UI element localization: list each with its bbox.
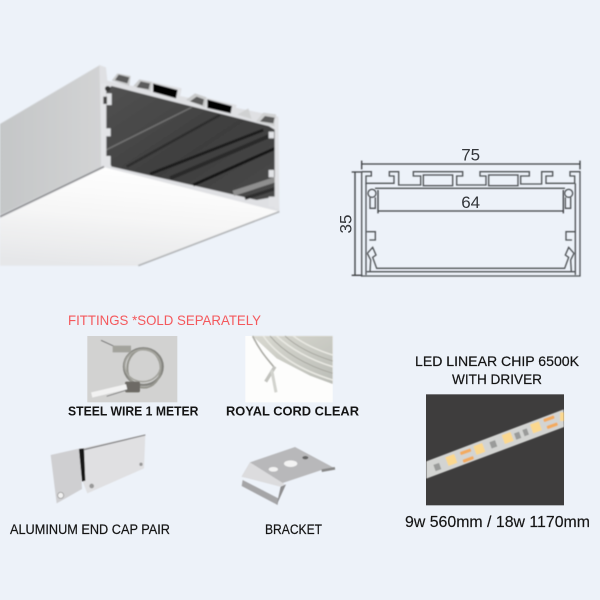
image: bracket: [242, 447, 335, 505]
heading: LED chip: [415, 353, 580, 387]
label: 64: 64: [461, 193, 480, 212]
label: 75: 75: [461, 145, 480, 164]
side face: [0, 65, 102, 215]
image: LED strip: [426, 394, 564, 505]
bottom face: [0, 167, 279, 266]
label: bracket: BRACKET: [265, 522, 322, 537]
image: end cap pair: [51, 434, 145, 503]
interior: [103, 86, 276, 200]
interior ribs: [106, 107, 276, 198]
product render: aluminium profile: [0, 65, 279, 266]
label: wattage: 9w 560mm / 18w 1170mm: [405, 514, 590, 531]
frame clips: [101, 83, 279, 208]
label: steel wire: STEEL WIRE 1 METER: [68, 404, 198, 418]
label: royal cord: ROYAL CORD CLEAR: [226, 404, 359, 418]
heading: LED chip: WITH DRIVER: [452, 371, 542, 387]
end frame: [0, 65, 279, 266]
dimension lines: [352, 161, 580, 275]
label: 35: 35: [336, 215, 355, 233]
image: steel wire: [87, 336, 177, 402]
image: royal cord: [245, 336, 333, 402]
top clips: [112, 73, 276, 127]
label: end cap pair: ALUMINUM END CAP PAIR: [10, 522, 170, 537]
dimension drawing: [336, 145, 580, 276]
outline section: [362, 172, 580, 276]
heading: fittings: FITTINGS *SOLD SEPARATELY: [68, 312, 262, 328]
heading: LED chip: LED LINEAR CHIP 6500K: [415, 353, 580, 369]
